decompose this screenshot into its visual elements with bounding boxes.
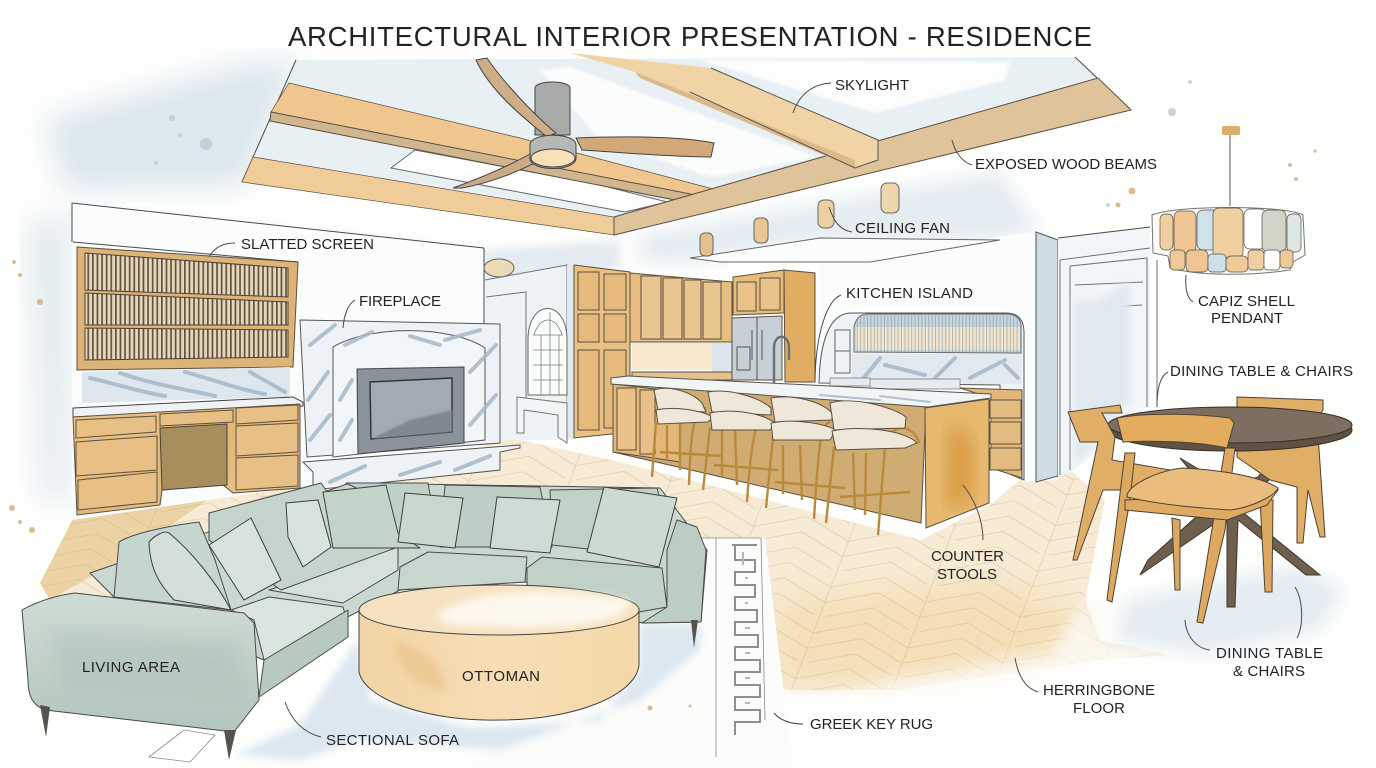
label: exposed wood beams: EXPOSED WOOD BEAMS [975,156,1157,173]
icon: ceiling fan [453,58,714,188]
refrigerator [732,316,782,380]
sofa wash [50,630,245,700]
label: capiz shell pendant [1198,293,1295,327]
stool seats [654,388,917,450]
label: slatted screen: SLATTED SCREEN [241,236,374,253]
dining table & chairs [1068,397,1352,655]
label: herringbone floor: HERRINGBONE [1043,682,1155,699]
label: counter stools: COUNTER [931,548,1004,565]
watercolor washes [25,60,1040,500]
panel: slatted screen [77,247,298,370]
label: living area: LIVING AREA [82,659,180,676]
panel: kitchen cabinets [574,265,815,438]
icon: capiz shell pendant [1152,126,1305,274]
sectional sofa [22,483,707,760]
label: dining table and chairs bottom: & CHAIRS [1233,663,1305,680]
table top [1108,407,1352,451]
front chair [1107,414,1278,623]
label: dining table and chairs top: DINING TABLE & CHAIRS [1170,363,1353,380]
panel: rear walls [72,203,1157,520]
label: herringbone floor [1043,682,1155,717]
shell tiles [1160,208,1301,272]
blue floor shadow [1115,565,1345,655]
sink faucet [774,337,789,383]
counter stools [652,388,919,535]
label: dining table and chairs bottom [1216,645,1323,680]
ottoman [359,585,639,720]
pendant lights [700,183,899,256]
ceiling light drum [484,259,514,277]
panel: built-in desk with marble backsplash [73,367,303,515]
label leader lines [209,83,1302,737]
blue shadow under sofa [235,625,700,760]
label: sectional sofa: SECTIONAL SOFA [326,732,459,749]
panel: ceiling [242,53,1131,235]
label: counter stools: STOOLS [937,566,997,583]
label: capiz shell pendant: PENDANT [1211,310,1283,327]
rear base [90,483,707,660]
left chair [1068,405,1170,560]
label: ceiling fan: CEILING FAN [855,220,950,237]
panel: arched alcove with slats [819,313,1024,480]
label: fireplace: FIREPLACE [359,293,441,310]
exposed wood beams [242,53,1131,235]
label: skylight: SKYLIGHT [835,77,909,94]
label: herringbone floor: FLOOR [1073,700,1125,717]
paint splatters [9,80,1317,710]
sofa legs [40,620,698,760]
label: greek key rug: GREEK KEY RUG [810,716,933,733]
label: kitchen island: KITCHEN ISLAND [846,285,973,302]
table base [1140,457,1320,607]
label: capiz shell pendant: CAPIZ SHELL [1198,293,1295,310]
back cushions [114,483,668,610]
seats [269,547,398,603]
front arm [22,593,259,732]
throw pillows [149,485,677,610]
rug [149,538,793,768]
panel: marble fireplace [300,320,520,490]
label: dining table and chairs bottom: DINING TABLE [1216,645,1323,662]
title: ARCHITECTURAL INTERIOR PRESENTATION - RESIDENCE [288,21,1092,52]
rear chair [1237,397,1325,543]
skylight opening [391,150,667,212]
stool legs and footrests [652,408,919,535]
label: ottoman: OTTOMAN [462,668,540,685]
label: counter stools [931,548,1004,583]
panel: kitchen island [611,337,991,528]
panel: arched window [517,308,567,443]
panel: floor [40,438,1190,705]
right arm [642,520,706,623]
